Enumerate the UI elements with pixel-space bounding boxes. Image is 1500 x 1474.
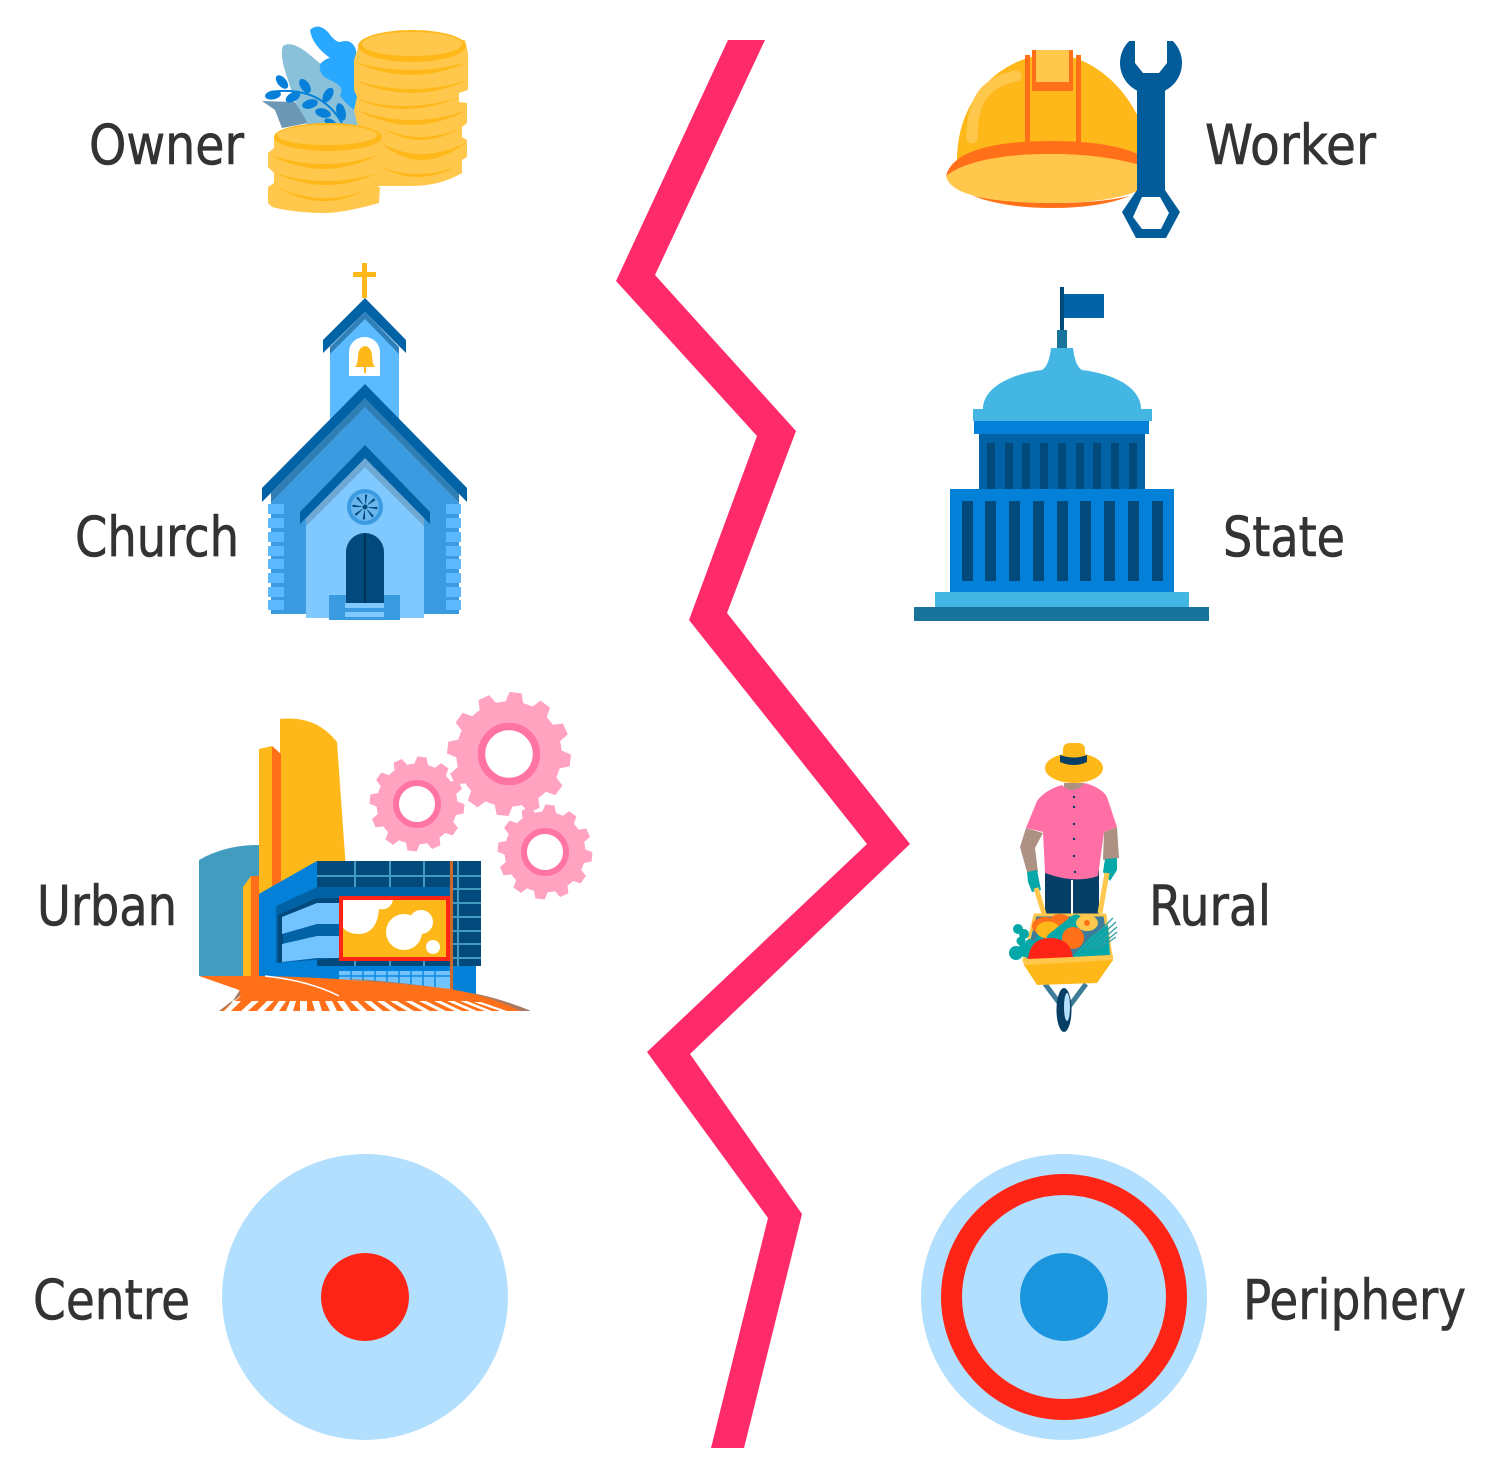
label: Church: Church <box>75 505 239 569</box>
background towers <box>199 718 346 976</box>
label: Owner: Owner <box>89 113 245 177</box>
dome <box>973 348 1152 421</box>
hard hat <box>946 50 1142 208</box>
icon: urban buildings and gears <box>199 686 597 1011</box>
gloves <box>1027 858 1117 892</box>
icon: centre target <box>222 1154 508 1440</box>
spire base <box>1057 330 1067 348</box>
nave <box>262 384 467 614</box>
small coin stack <box>268 123 382 213</box>
large coin stack <box>354 30 468 186</box>
straw hat <box>1045 743 1103 783</box>
icon: periphery target <box>921 1154 1207 1440</box>
main building <box>259 861 481 998</box>
bell tower <box>323 298 406 425</box>
billboard <box>341 898 448 959</box>
arms <box>1020 783 1119 872</box>
trousers <box>1045 870 1099 915</box>
barrow handles <box>1036 873 1107 917</box>
rose window <box>347 489 383 525</box>
gears <box>365 686 597 904</box>
label: Rural: Rural <box>1149 874 1271 938</box>
side bricks <box>268 504 461 610</box>
cornice band <box>974 421 1149 434</box>
barrow with vegetables <box>1009 914 1117 985</box>
cross <box>353 263 376 298</box>
label: Centre: Centre <box>33 1268 190 1332</box>
lower storey <box>950 489 1174 592</box>
front gable <box>300 445 430 618</box>
door <box>346 533 384 603</box>
icon: coins and plant <box>262 26 468 213</box>
flag <box>1060 287 1104 330</box>
icon: farmer with wheelbarrow <box>1009 743 1119 1032</box>
wheel and struts <box>1045 984 1086 1032</box>
label: Periphery: Periphery <box>1243 1268 1466 1332</box>
icon: hard hat and wrench <box>946 30 1182 238</box>
plinth <box>914 592 1209 621</box>
plant leaves <box>262 26 360 128</box>
icon: capitol building <box>914 287 1209 621</box>
icon: church <box>262 263 467 620</box>
label: Urban: Urban <box>37 874 177 938</box>
wrench <box>1120 30 1182 238</box>
steps <box>329 595 400 620</box>
shirt <box>1026 783 1117 879</box>
label: State: State <box>1223 505 1345 569</box>
upper drum <box>979 434 1145 489</box>
road with crossing <box>199 976 531 1011</box>
zigzag dividing line <box>616 40 910 1448</box>
label: Worker: Worker <box>1205 113 1377 177</box>
